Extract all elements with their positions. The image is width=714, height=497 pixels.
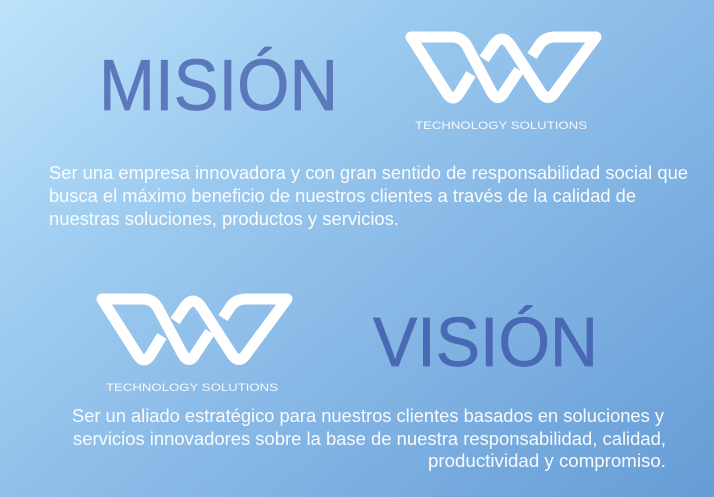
logo: top — [411, 37, 596, 132]
mission text: nuestras soluciones, productos y servicios. — [49, 209, 399, 229]
mission text: Ser una empresa innovadora y con gran sentido de responsabilidad social que — [49, 163, 688, 183]
logo: bottom — [102, 299, 287, 394]
mission text — [49, 163, 688, 229]
vision text: Ser un aliado estratégico para nuestros clientes basados en soluciones y — [72, 406, 664, 426]
logo: bottom: TECHNOLOGY SOLUTIONS — [106, 382, 278, 394]
logo: top: TECHNOLOGY SOLUTIONS — [415, 120, 587, 132]
mission text: busca el máximo beneficio de nuestros clientes a través de la calidad de — [49, 186, 636, 206]
vision text: servicios innovadores sobre la base de nuestra responsabilidad, calidad, — [73, 429, 666, 449]
vision text: productividad y compromiso. — [428, 451, 666, 471]
title: MISIÓN: MISIÓN — [99, 46, 338, 126]
title: VISIÓN: VISIÓN — [373, 303, 598, 381]
vision text — [72, 406, 666, 471]
